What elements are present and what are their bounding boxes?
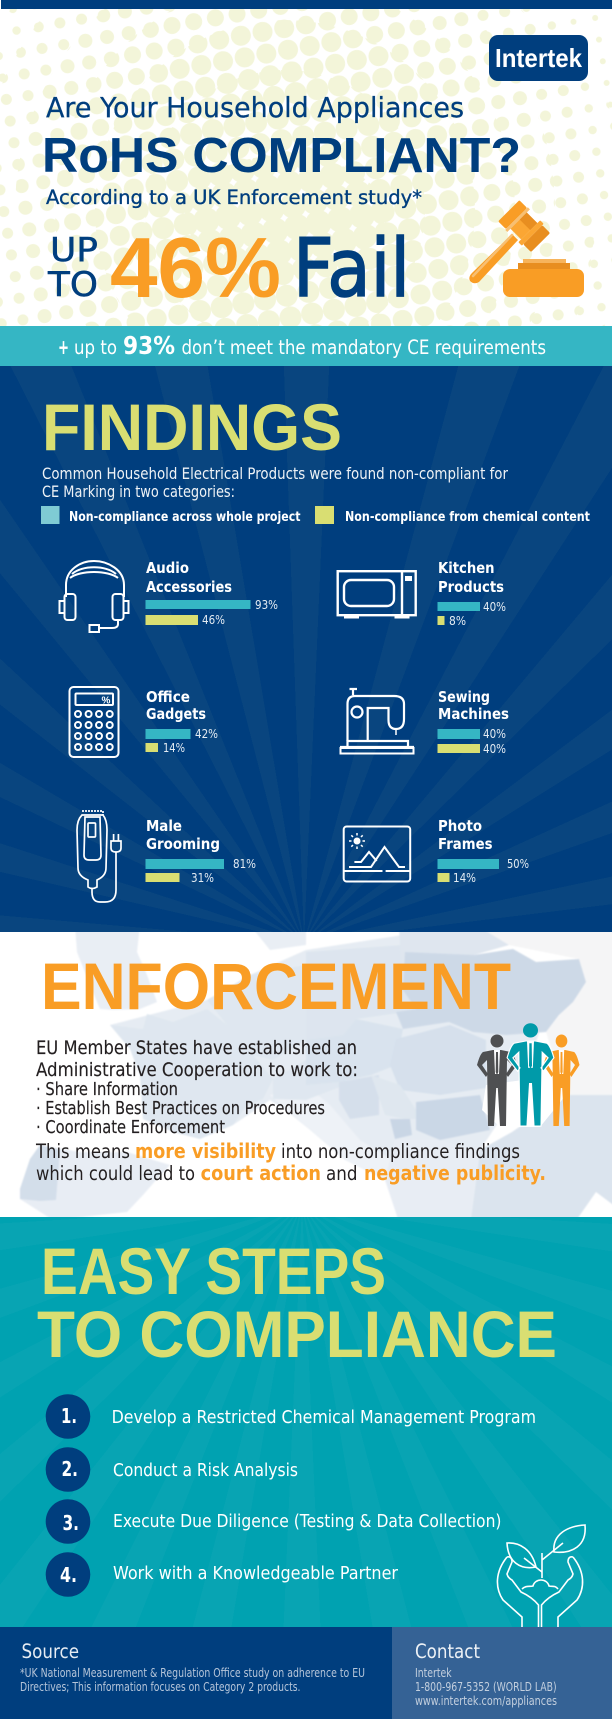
item: office gadgets [70, 687, 218, 757]
body text: Administrative Cooperation to work to: [36, 1059, 358, 1081]
heading: enforcement: ENFORCEMENT [41, 949, 511, 1023]
step 4: Work with a Knowledgeable Partner [113, 1563, 399, 1584]
conclusion text: and [326, 1162, 358, 1185]
background map of Europe [20, 925, 612, 1225]
step 1: Develop a Restricted Chemical Management Program [112, 1407, 536, 1428]
conclusion text: which could lead to [36, 1162, 195, 1185]
item: sewing machines: 40% [483, 742, 506, 756]
item: photo frames: 50% [507, 857, 529, 871]
icon: headset [60, 561, 128, 632]
item: male grooming: 81% [233, 857, 256, 871]
headline statistic: up to 46% fail: Fail [293, 222, 410, 315]
item: audio accessories: Accessories [146, 578, 232, 596]
banner: 93% CE requirements: up to [74, 336, 117, 359]
step 2 [46, 1447, 298, 1492]
banner: 93% CE requirements: + [58, 335, 69, 359]
intro text [42, 464, 508, 501]
item: sewing machines: Sewing [438, 688, 490, 706]
step 3: Execute Due Diligence (Testing & Data Collection) [113, 1511, 502, 1532]
legend [41, 506, 590, 525]
contact details: 1-800-967-5352 (WORLD LAB) [415, 1679, 557, 1694]
item: kitchen products: Kitchen [438, 559, 494, 577]
icon: photo frame [344, 826, 410, 882]
logo [489, 35, 588, 81]
conclusion text: more visibility [135, 1139, 276, 1163]
intro text: Common Household Electrical Products were found non-compliant for [42, 464, 508, 483]
conclusion text: into non-compliance findings [281, 1140, 520, 1163]
headline [42, 92, 521, 209]
step 4 [46, 1552, 399, 1597]
icon: gavel [469, 199, 584, 297]
item: sewing machines: 40% [483, 727, 506, 741]
icon: three business people [477, 1023, 580, 1127]
conclusion text [35, 1139, 546, 1185]
panel: source [0, 1627, 392, 1719]
icon: sewing machine [340, 689, 414, 754]
icon: microwave [338, 571, 416, 618]
item: male grooming: Male [146, 817, 182, 835]
step 1 [46, 1394, 536, 1439]
headline: Are Your Household Appliances [46, 92, 464, 124]
item: audio accessories: 93% [255, 598, 278, 612]
banner: 93% CE requirements: 93% [123, 331, 175, 360]
body text: · Establish Best Practices on Procedures [36, 1099, 325, 1119]
item: male grooming [77, 811, 256, 902]
headline: According to a UK Enforcement study* [46, 186, 422, 209]
item: kitchen products [338, 559, 506, 628]
item: sewing machines [340, 688, 509, 756]
body text: · Share Information [36, 1080, 178, 1100]
conclusion text: This means [35, 1140, 130, 1163]
body text [36, 1037, 358, 1138]
body text: EU Member States have established an [36, 1037, 357, 1059]
item: photo frames: Frames [438, 835, 493, 853]
banner: 93% CE requirements [0, 326, 612, 366]
heading: easy steps to compliance: TO COMPLIANCE [37, 1297, 557, 1371]
headline statistic: up to 46% fail: UP [50, 230, 98, 269]
step 3 [46, 1499, 501, 1544]
icon: calculator: % [102, 696, 110, 706]
panel: findings [0, 366, 612, 932]
item: kitchen products: 8% [449, 614, 466, 628]
headline statistic: up to 46% fail: 46% [110, 221, 281, 316]
item: photo frames [344, 817, 529, 885]
item: audio accessories: 46% [202, 613, 225, 627]
item: photo frames: Photo [438, 817, 482, 835]
banner: 93% CE requirements: don’t meet the mandatory CE requirements [182, 336, 546, 359]
item: kitchen products: 40% [483, 600, 506, 614]
logo: Intertek [495, 43, 582, 73]
item: audio accessories: Audio [146, 559, 189, 577]
panel: header [0, 0, 612, 326]
icon: calculator [70, 687, 118, 757]
panel: easy steps [0, 1217, 612, 1627]
panel: enforcement [0, 932, 612, 1217]
icon: hands holding plant [497, 1525, 585, 1627]
intro text: CE Marking in two categories: [42, 482, 235, 501]
contact details [415, 1665, 557, 1708]
item: sewing machines: Machines [438, 705, 509, 723]
contact details: www.intertek.com/appliances [415, 1693, 557, 1708]
icon: hair clipper [77, 811, 121, 902]
headline: RoHS COMPLIANT? [42, 129, 521, 183]
step 3: 3. [62, 1511, 79, 1535]
item: office gadgets: Office [146, 688, 190, 706]
step 2: Conduct a Risk Analysis [113, 1460, 298, 1481]
item: kitchen products: Products [438, 578, 504, 596]
item: male grooming: Grooming [146, 835, 220, 853]
source note [20, 1665, 365, 1694]
panel: contact [392, 1627, 612, 1719]
conclusion text: court action [201, 1161, 321, 1185]
item: office gadgets: 42% [195, 727, 218, 741]
panel: contact: Contact [415, 1640, 480, 1663]
contact details: Intertek [415, 1665, 452, 1680]
item: male grooming: 31% [191, 871, 214, 885]
headline statistic: up to 46% fail: TO [47, 265, 98, 305]
headline statistic: up to 46% fail [47, 221, 410, 316]
heading: easy steps to compliance: EASY STEPS [41, 1234, 386, 1308]
heading: easy steps to compliance [37, 1234, 557, 1371]
legend: Non-compliance across whole project [69, 509, 301, 525]
step 2: 2. [62, 1457, 78, 1481]
item: office gadgets: Gadgets [146, 705, 206, 723]
item: office gadgets: 14% [163, 741, 185, 755]
step 1: 1. [61, 1404, 77, 1428]
step 4: 4. [60, 1563, 77, 1587]
body text: · Coordinate Enforcement [36, 1118, 225, 1138]
item: audio accessories [60, 559, 278, 632]
panel: source: Source [22, 1640, 79, 1663]
source note: Directives; This information focuses on Category 2 products. [20, 1679, 300, 1694]
heading: findings: FINDINGS [42, 390, 342, 464]
item: photo frames: 14% [453, 871, 476, 885]
conclusion text: negative publicity. [364, 1161, 546, 1185]
